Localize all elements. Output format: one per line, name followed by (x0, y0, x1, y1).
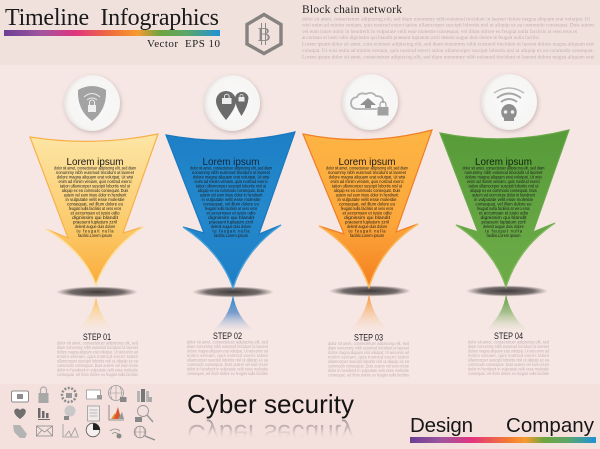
step text: consequat, vel illum dolore eu feugiat nulla facilisis (328, 372, 409, 378)
body text: dignissim qui blandit (208, 215, 255, 220)
icon: people lock (137, 389, 152, 402)
step text: consequat, vel illum dolore eu feugiat nulla facilisis (468, 371, 549, 376)
step text: dolor sit amet, consectetuer adipiscing elit, sed (187, 340, 269, 344)
body text: dolor sit amet, consectetuer adipiscing elit, sed diam (326, 166, 409, 170)
icon: globe lock (108, 386, 126, 402)
body text: te feugait nulla (485, 228, 523, 234)
step text: dolor in hendrerit in vulputate velit esse molestie (468, 366, 550, 372)
body text (190, 166, 273, 238)
body text: te feugait nulla (212, 228, 250, 234)
body text: aliquip ex ea commodo consequat. Duis (470, 188, 537, 193)
step text: minim veniam, quis nostrud exerci tation (187, 353, 269, 358)
step text: consequat, vel illum dolore eu feugiat nulla facilisis (57, 372, 138, 377)
body text: delenit augue duis dolore (483, 224, 524, 229)
body text: et accumsan et iusto odio (479, 210, 529, 216)
word: company: Company (506, 414, 595, 437)
title block (4, 5, 220, 50)
icon: globe search (134, 426, 155, 440)
step text: commodo consequat. Duis autem vel eum iriure (187, 362, 269, 367)
body text: dolore magna aliquam erat volutpat. Ut wisi (329, 174, 405, 180)
icon grid (12, 386, 155, 440)
step text: dolore magna aliquam erat volutpat. Ut wisi enim ad (187, 348, 269, 354)
body text (54, 166, 137, 238)
body text: tation ullamcorper suscipit lobortis nisl ut (332, 184, 403, 188)
step text: consequat, vel illum dolore eu feugiat nulla facilisis (187, 371, 268, 376)
body text: nonummy nibh euismod tincidunt ut laoreet (464, 170, 543, 175)
body text: autem vel eum iriure dolor in hendrerit (336, 192, 399, 198)
reflection (348, 294, 390, 331)
paragraph: vel eum iriure dolor in hendrerit in vulputate velit esse molestie consequat, vel illum dolore eu feugiat nulla facilisis at vero eros et (302, 28, 578, 35)
step text: ullamcorper suscipit lobortis nisl ut aliquip ex ea (328, 359, 410, 364)
body text: enim ad minim veniam, quis nostrud exerci (467, 179, 540, 184)
reflection (484, 294, 528, 331)
step text: dolor in hendrerit in vulputate velit esse molestie (187, 366, 269, 372)
header text block (302, 4, 595, 60)
step text: dolore magna aliquam erat volutpat. Ut wisi enim ad (328, 350, 410, 355)
arrow head highlight (456, 223, 555, 287)
panel: arrow 2 blue (166, 132, 295, 331)
body text: feugiat nulla facilisis at vero eros (477, 206, 530, 211)
ground shadow (192, 286, 274, 298)
body text: et accumsan et iusto odio (206, 210, 256, 216)
step text: dolore magna aliquam erat volutpat. Ut wisi enim ad (468, 348, 550, 354)
step text: commodo consequat. Duis autem vel eum iriure (468, 362, 550, 367)
icon circle 2: location locks (204, 75, 260, 131)
body text: dolor sit amet, consectetuer adipiscing elit, sed diam (462, 166, 545, 170)
body text: delenit augue duis dolore (211, 224, 252, 229)
panel: arrow 4 green (440, 130, 569, 331)
body text: tation ullamcorper suscipit lobortis nisl ut (196, 184, 267, 188)
panel: arrow 1 yellow (30, 134, 158, 329)
body text: nonummy nibh euismod tincidunt ut laoreet (192, 170, 271, 175)
heading: Lorem ipsum (66, 156, 124, 168)
body text: delenit augue duis dolore (75, 224, 116, 229)
step label: STEP 03 (354, 332, 383, 342)
panel: arrow 3 orange (303, 130, 432, 331)
step text: commodo consequat. Duis autem vel eum iriure (328, 364, 410, 368)
body text: dolor sit amet, consectetuer adipiscing elit, sed diam (54, 166, 137, 170)
body text: consequat, vel illum dolore eu (476, 202, 531, 206)
body text: facilisi.Lorem ipsum (78, 233, 113, 238)
arrow head highlight (46, 227, 143, 285)
step text: ullamcorper suscipit lobortis nisl ut aliquip ex ea (187, 358, 269, 362)
body text: tation ullamcorper suscipit lobortis nisl ut (60, 184, 131, 188)
icon: blockchain hexagon: B (257, 24, 271, 46)
body text: praesent luptatum zzril (209, 220, 253, 224)
step text: dolor in hendrerit in vulputate velit esse molestie (328, 368, 410, 373)
company block (410, 414, 596, 443)
body text: facilisi.Lorem ipsum (350, 233, 385, 238)
body text: enim ad minim veniam, quis nostrud exerci (58, 179, 132, 184)
step text: ullamcorper suscipit lobortis nisl ut aliquip ex ea (468, 358, 550, 362)
step text: diam nonummy nibh euismod tincidunt ut laoreet (328, 346, 410, 350)
subtitle: Vector EPS 10 (147, 38, 220, 50)
icon: gear lock (62, 388, 76, 402)
icon: wifi lock (110, 429, 122, 438)
rainbow bar (4, 30, 220, 36)
step text: dolor sit amet, consectetuer adipiscing elit, sed (328, 341, 410, 346)
body text: dolore magna aliquam erat volutpat. Ut wisi (465, 174, 542, 180)
rainbow bar (410, 437, 596, 443)
body text: feugiat nulla facilisis at vero eros (205, 206, 257, 211)
step text: dolor in hendrerit in vulputate velit esse molestie (57, 368, 139, 372)
icon: heart (14, 408, 26, 419)
icon: line chart (63, 424, 79, 437)
step text: dolor sit amet, consectetuer adipiscing elit, sed (468, 340, 550, 344)
ground shadow (466, 286, 548, 296)
step text: diam nonummy nibh euismod tincidunt ut laoreet (468, 344, 550, 349)
icon: touch hand (13, 425, 27, 438)
icon circle 1: shield (64, 75, 120, 131)
step label: STEP 01 (83, 332, 111, 342)
body text: aliquip ex ea commodo consequat. Duis (62, 188, 128, 193)
paragraph (302, 16, 595, 60)
step text (328, 341, 410, 378)
word: design: Design (410, 414, 473, 437)
icon: area chart (109, 405, 124, 420)
step 1 (57, 332, 139, 377)
body text: facilisi.Lorem ipsum (486, 233, 521, 238)
body text: consequat, vel illum dolore eu (67, 202, 123, 206)
body text: nonummy nibh euismod tincidunt ut laoreet (56, 170, 135, 175)
body text: enim ad minim veniam, quis nostrud exerci (194, 179, 268, 184)
body text: praesent luptatum zzril (345, 220, 389, 224)
body text: aliquip ex ea commodo consequat. Duis (334, 188, 400, 193)
step text: ullamcorper suscipit lobortis nisl ut aliquip ex ea (57, 358, 139, 364)
body text: facilisi.Lorem ipsum (214, 233, 249, 238)
paragraph: wisi enim ad minim veniam, quis nostrud exerci tation ullamcorper suscipit lobortis nisl ut aliquip ex ea commodo consequat. Duis autem (302, 22, 594, 28)
icon: blockchain hexagon (247, 14, 281, 54)
step label: STEP 04 (494, 331, 523, 341)
ground shadow (56, 286, 138, 298)
step 4 (468, 331, 550, 376)
step text (468, 340, 550, 376)
arrow shape (440, 130, 569, 287)
icon: monitor lock (12, 391, 28, 402)
title: Timeline Infographics (5, 5, 219, 31)
body text: dignissim qui blandit (72, 215, 119, 220)
body text (326, 166, 409, 238)
step 3 (328, 332, 410, 378)
body text: praesent luptatum zzril (482, 220, 526, 224)
body text: autem vel eum iriure dolor in hendrerit (64, 192, 127, 198)
heading: Lorem ipsum (475, 156, 532, 168)
cyber security heading: Cyber security (187, 389, 354, 419)
body text: praesent luptatum zzril (73, 220, 117, 224)
step text (187, 340, 269, 376)
body text: enim ad minim veniam, quis nostrud exerci (330, 179, 404, 184)
body text: autem vel eum iriure dolor in hendrerit (472, 192, 536, 198)
body text: et accumsan et iusto odio (342, 210, 392, 216)
body text: autem vel eum iriure dolor in hendrerit (200, 192, 263, 198)
icon: bar chart (38, 408, 50, 420)
step text: dolore magna aliquam erat volutpat. Ut wisi enim ad (57, 350, 139, 354)
ground shadow (329, 286, 411, 296)
icon: padlock (38, 387, 48, 403)
icon circle 4: wifi skull (481, 74, 537, 130)
body text: dolore magna aliquam erat volutpat. Ut wisi (193, 174, 269, 180)
body text: in vulputate velit esse molestie (202, 197, 261, 202)
icon: screen lock (86, 390, 102, 400)
step text (57, 340, 139, 377)
body text: dignissim qui blandit (480, 215, 528, 220)
step text: diam nonummy nibh euismod tincidunt ut laoreet (187, 344, 269, 349)
arrow shape (166, 132, 295, 288)
icon: pie chart (86, 423, 100, 437)
body text: delenit augue duis dolore (347, 224, 388, 229)
footer band (0, 384, 600, 449)
body text: in vulputate velit esse molestie (474, 197, 534, 202)
step text: dolor sit amet, consectetuer adipiscing elit, sed (57, 340, 139, 346)
body text: et accumsan et iusto odio (70, 210, 120, 216)
arrow head highlight (183, 225, 281, 288)
paragraph: Lorem ipsum dolor sit amet, cons ectetuer adipiscing elit, sed diam nonummy nibh euismod tincidunt ut laoreet dolore magna aliquam erat (302, 42, 595, 48)
body text: dignissim qui blandit (344, 215, 391, 220)
heading: block chain network: Block chain network (302, 4, 402, 16)
icon: magnifier lock (135, 406, 153, 422)
body text: feugiat nulla facilisis at vero eros (341, 206, 393, 211)
step label: STEP 02 (213, 331, 242, 341)
body text: dolore magna aliquam erat volutpat. Ut wisi (57, 174, 133, 180)
step text: minim veniam, quis nostrud exerci tation (57, 354, 139, 359)
body text: consequat, vel illum dolore eu (203, 202, 259, 206)
body text: te feugait nulla (348, 228, 386, 234)
arrow head highlight (319, 224, 418, 287)
body text: tation ullamcorper suscipit lobortis nisl ut (468, 184, 539, 188)
body text (462, 166, 545, 238)
heading: Lorem ipsum (202, 156, 260, 168)
arrow shape (30, 134, 158, 285)
icon: clock lock (64, 406, 76, 420)
paragraph: Lorem ipsum dolor sit amet, consectetuer adipiscing elit, sed diam nonummy nibh euismod tincidunt ut laoreet dolore magna aliquam erat (302, 54, 595, 60)
paragraph: dolor sit amet, consectetuer adipiscing elit, sed diam nonummy nibh euismod tincidunt ut laoreet dolore magna aliquam erat volutpat. Ut (302, 16, 591, 22)
arrow shape (303, 130, 432, 287)
reflection (77, 297, 114, 329)
reflection (212, 295, 255, 331)
body text: feugiat nulla facilisis at vero eros (69, 206, 121, 211)
paragraph: accumsan et iusto odio dignissim qui blandit praesent luptatum zzril delenit augue duis dolore te feugait nulla facilisi. (302, 34, 540, 41)
paragraph: volutpat. Ut wisi enim ad minim veniam, quis nostrud exerci tation ullamcorper suscipit lobortis nisl ut aliquip ex ea commodo consequat. (302, 48, 594, 54)
heading: Lorem ipsum (338, 156, 396, 168)
cyber security reflection: Cyber security (187, 419, 354, 449)
body text: consequat, vel illum dolore eu (339, 202, 395, 206)
body text: aliquip ex ea commodo consequat. Duis (198, 188, 264, 193)
body text: dolor sit amet, consectetuer adipiscing elit, sed diam (190, 166, 273, 170)
header band (0, 0, 600, 65)
icon circle 3: cloud upload lock (342, 74, 398, 130)
icon: envelope (36, 426, 52, 436)
body text: nonummy nibh euismod tincidunt ut laoreet (328, 170, 407, 175)
icon: document (88, 406, 100, 421)
step text: minim veniam, quis nostrud exerci tation (468, 353, 550, 358)
step text: minim veniam, quis nostrud exerci tation (328, 354, 410, 360)
body text: te feugait nulla (76, 228, 114, 234)
step 2 (187, 331, 269, 376)
body text: in vulputate velit esse molestie (338, 197, 397, 202)
step text: commodo consequat. Duis autem vel eum iriure (57, 363, 139, 368)
step text: diam nonummy nibh euismod tincidunt ut laoreet (57, 345, 139, 350)
body text: in vulputate velit esse molestie (66, 197, 125, 202)
